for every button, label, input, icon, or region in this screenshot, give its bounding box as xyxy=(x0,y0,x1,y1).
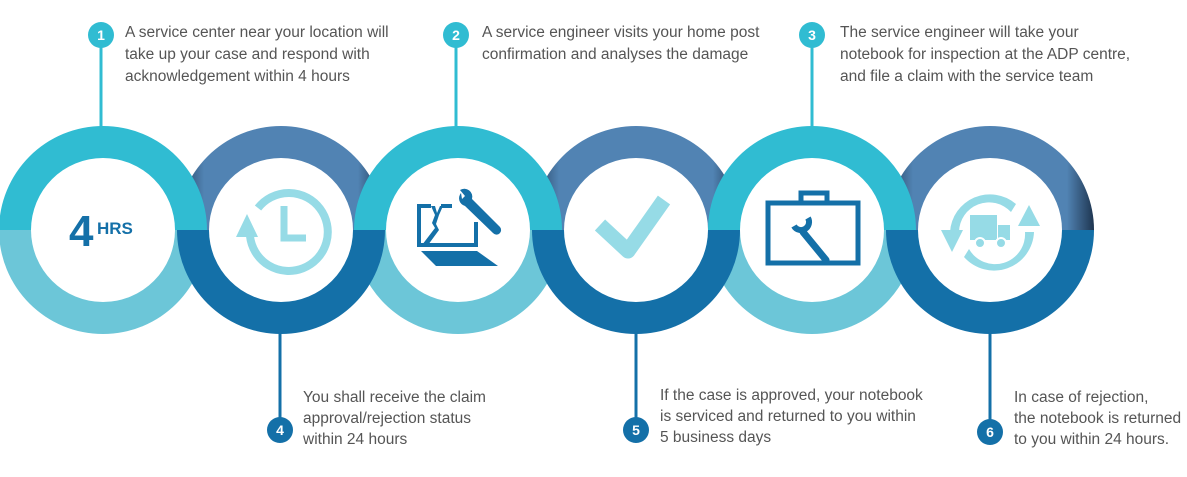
step 4: within 24 hours xyxy=(302,431,408,448)
step 1: acknowledgement within 4 hours xyxy=(125,68,350,85)
step 6: In case of rejection, xyxy=(1014,389,1148,406)
step 2: A service engineer visits your home post xyxy=(482,24,760,41)
step 6: 6 xyxy=(986,424,994,440)
step 2: confirmation and analyses the damage xyxy=(482,46,748,63)
step 1: take up your case and respond with xyxy=(125,46,370,63)
step 1: A service center near your location will xyxy=(125,24,389,41)
step 5: If the case is approved, your notebook xyxy=(660,387,923,404)
step 2: 2 xyxy=(452,27,460,43)
step 4: You shall receive the claim xyxy=(303,389,486,406)
step 4: approval/rejection status xyxy=(303,410,471,427)
step 5 xyxy=(623,332,923,446)
icon: checkmark xyxy=(600,200,664,251)
icon: 4 hrs: HRS xyxy=(97,219,133,238)
icon: clock xyxy=(236,193,328,271)
step 1 xyxy=(88,22,389,128)
icon: broken laptop with wrench xyxy=(419,189,501,266)
step 4 xyxy=(267,332,486,448)
icon: briefcase with wrench xyxy=(768,193,858,263)
step 6: to you within 24 hours. xyxy=(1014,431,1169,448)
step 6: the notebook is returned xyxy=(1014,410,1181,427)
icon: 4 hrs: 4 xyxy=(69,207,94,256)
step 2 xyxy=(443,22,760,128)
step 3: and file a claim with the service team xyxy=(840,68,1093,85)
step 3 xyxy=(799,22,1130,128)
step 5: is serviced and returned to you within xyxy=(660,408,916,425)
step 5: 5 business days xyxy=(660,429,771,446)
rings chain xyxy=(0,126,1094,334)
step 3: 3 xyxy=(808,27,816,43)
icon: 4 hrs xyxy=(69,207,133,256)
step 1: 1 xyxy=(97,27,105,43)
step 3: notebook for inspection at the ADP centre, xyxy=(840,46,1130,63)
icon: truck return xyxy=(941,194,1040,271)
step 6 xyxy=(977,332,1181,448)
step 3: The service engineer will take your xyxy=(840,24,1079,41)
step 5: 5 xyxy=(632,422,640,438)
step 4: 4 xyxy=(276,422,284,438)
